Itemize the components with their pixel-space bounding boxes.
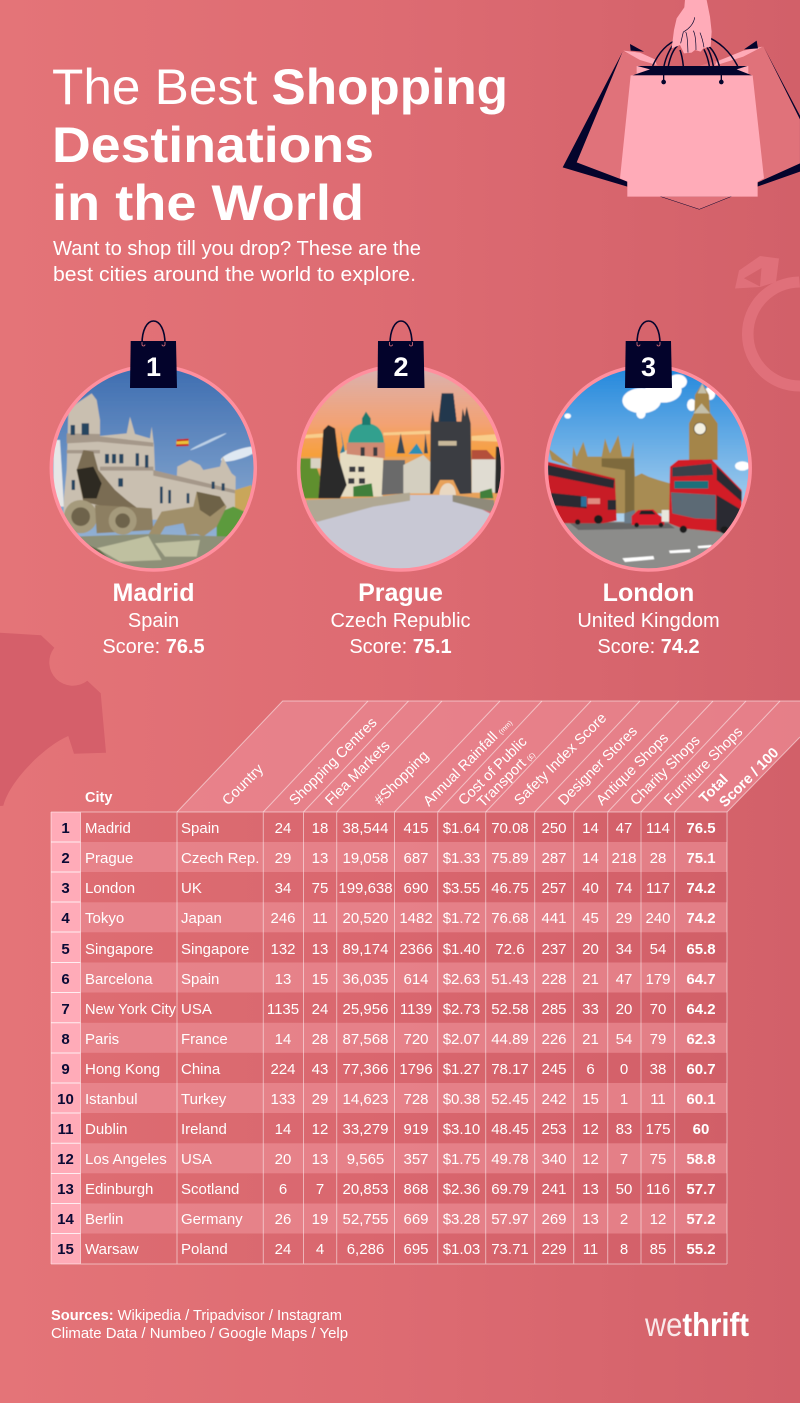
- row 12 Los Angeles: Los Angeles: [85, 1151, 167, 1168]
- row 12 Los Angeles: 58.8: [686, 1151, 716, 1168]
- row 14 Berlin: Berlin: [85, 1211, 123, 1228]
- photo ring: [299, 366, 503, 570]
- row 14 Berlin: 13: [582, 1211, 599, 1228]
- row 3 London: $3.55: [443, 880, 480, 897]
- row 15 Warsaw: 11: [583, 1241, 598, 1258]
- row 10 Istanbul: 1: [620, 1091, 628, 1108]
- row 13 Edinburgh: 868: [403, 1181, 429, 1198]
- row 4 Tokyo: 20,520: [343, 910, 388, 927]
- row 15 Warsaw: 85: [650, 1241, 666, 1258]
- row 2 Prague: 287: [541, 850, 567, 867]
- row 15 Warsaw: 73.71: [491, 1241, 529, 1258]
- rank badge 3: [625, 321, 672, 388]
- left back bag: [563, 44, 673, 187]
- row 4 Tokyo: 441: [541, 910, 567, 927]
- row 9 Hong Kong: Hong Kong: [85, 1061, 160, 1078]
- row 6 Barcelona: 228: [541, 971, 567, 988]
- row 10 Istanbul: Turkey: [181, 1091, 227, 1108]
- row 5 Singapore: 13: [312, 941, 328, 958]
- row 8 Paris: 79: [650, 1031, 666, 1048]
- row 4 Tokyo: Tokyo: [85, 910, 124, 927]
- row 11 Dublin: Ireland: [181, 1121, 227, 1138]
- row 3 London: 74: [616, 880, 632, 897]
- row stripes: [80, 812, 727, 1264]
- row 6 Barcelona: 51.43: [491, 971, 529, 988]
- row 6 Barcelona: [61, 971, 716, 988]
- row 15 Warsaw: 8: [620, 1241, 628, 1258]
- row 5 Singapore: 65.8: [686, 941, 716, 958]
- row 10 Istanbul: $0.38: [443, 1091, 480, 1108]
- panel: rank 2 Prague: [297, 321, 507, 658]
- column headings rotated: Cost of Public: [456, 734, 531, 809]
- column headings rotated: Flea Markets: [323, 738, 393, 809]
- row 11 Dublin: 14: [275, 1121, 291, 1138]
- row 8 Paris: 720: [403, 1031, 429, 1048]
- row 6 Barcelona: 64.7: [686, 971, 716, 988]
- rank badge 1: 1: [146, 352, 161, 382]
- row 11 Dublin: 175: [645, 1121, 671, 1138]
- row 14 Berlin: 14: [57, 1211, 74, 1228]
- decorative ring icon: [735, 256, 800, 392]
- row 11 Dublin: 83: [616, 1121, 632, 1138]
- row 15 Warsaw: 6,286: [347, 1241, 384, 1258]
- row 10 Istanbul: 29: [312, 1091, 328, 1108]
- row 13 Edinburgh: Edinburgh: [85, 1181, 153, 1198]
- row 15 Warsaw: 229: [541, 1241, 567, 1258]
- row 9 Hong Kong: [61, 1061, 716, 1078]
- row 8 Paris: 87,568: [343, 1031, 388, 1048]
- row 13 Edinburgh: 20,853: [343, 1181, 388, 1198]
- row 2 Prague: 687: [403, 850, 429, 867]
- row 9 Hong Kong: 245: [541, 1061, 567, 1078]
- row 10 Istanbul: 242: [541, 1091, 567, 1108]
- hand: [672, 0, 712, 53]
- row 12 Los Angeles: USA: [181, 1151, 212, 1168]
- row 13 Edinburgh: 6: [279, 1181, 287, 1198]
- city label Prague: Czech Republic: [330, 610, 471, 632]
- row 8 Paris: 226: [541, 1031, 567, 1048]
- row 1 Madrid: 38,544: [343, 820, 388, 837]
- row 3 London: 257: [541, 880, 567, 897]
- city label London: London: [603, 579, 694, 607]
- row 2 Prague: 28: [650, 850, 666, 867]
- row 14 Berlin: Germany: [181, 1211, 243, 1228]
- row 3 London: 34: [275, 880, 291, 897]
- row 11 Dublin: 12: [582, 1121, 599, 1138]
- row 3 London: 690: [403, 880, 429, 897]
- row 5 Singapore: 54: [650, 941, 666, 958]
- row 3 London: 117: [646, 880, 670, 897]
- row 15 Warsaw: 695: [403, 1241, 429, 1258]
- row 4 Tokyo: 240: [645, 910, 671, 927]
- row 12 Los Angeles: 9,565: [347, 1151, 384, 1168]
- row 1 Madrid: 1: [61, 820, 70, 837]
- row 11 Dublin: 12: [312, 1121, 328, 1138]
- row 5 Singapore: 34: [616, 941, 632, 958]
- row 1 Madrid: 14: [582, 820, 599, 837]
- city label London: Score: 74.2: [597, 636, 700, 658]
- column headings rotated: Antique Shops: [594, 730, 672, 809]
- logo: wethrift: wethrift: [644, 1306, 749, 1343]
- row 3 London: 75: [312, 880, 328, 897]
- row 5 Singapore: 5: [61, 941, 70, 958]
- row 8 Paris: $2.07: [443, 1031, 480, 1048]
- row 4 Tokyo: $1.72: [443, 910, 480, 927]
- row 6 Barcelona: 179: [645, 971, 671, 988]
- row 3 London: [61, 880, 716, 897]
- row 12 Los Angeles: $1.75: [443, 1151, 480, 1168]
- row 14 Berlin: [57, 1211, 716, 1228]
- row 13 Edinburgh: Scotland: [181, 1181, 239, 1198]
- city label Madrid: Spain: [128, 610, 179, 632]
- row 13 Edinburgh: 241: [541, 1181, 567, 1198]
- sources: [51, 1307, 348, 1342]
- row 7 New York City: 33: [582, 1001, 599, 1018]
- photo ring: [546, 366, 750, 570]
- row 1 Madrid: 415: [403, 820, 429, 837]
- right back bag: [700, 41, 800, 187]
- row 1 Madrid: 24: [275, 820, 291, 837]
- table: [51, 812, 727, 1264]
- row 13 Edinburgh: 13: [582, 1181, 599, 1198]
- row 1 Madrid: Spain: [181, 820, 219, 837]
- subtitle: [53, 238, 421, 286]
- row 9 Hong Kong: 1796: [399, 1061, 433, 1078]
- row 6 Barcelona: $2.63: [443, 971, 480, 988]
- photo: Prague: [297, 363, 507, 573]
- row 10 Istanbul: 728: [403, 1091, 429, 1108]
- row 14 Berlin: 12: [650, 1211, 666, 1228]
- row 7 New York City: 24: [312, 1001, 328, 1018]
- city label London: [577, 579, 720, 658]
- rank column: [51, 812, 80, 1264]
- row 6 Barcelona: 15: [312, 971, 328, 988]
- row 6 Barcelona: Barcelona: [85, 971, 153, 988]
- row 2 Prague: 75.89: [491, 850, 529, 867]
- city label Madrid: [102, 579, 205, 658]
- column headings rotated: Shopping Centres: [287, 715, 380, 809]
- column headings rotated: Total: [697, 772, 732, 807]
- row 8 Paris: 8: [61, 1031, 70, 1048]
- row 6 Barcelona: 6: [61, 971, 70, 988]
- row 15 Warsaw: 4: [316, 1241, 324, 1258]
- table header: [85, 701, 800, 812]
- row 4 Tokyo: 4: [61, 910, 70, 927]
- row 4 Tokyo: 246: [270, 910, 296, 927]
- row 3 London: 199,638: [338, 880, 393, 897]
- row 7 New York City: 64.2: [686, 1001, 716, 1018]
- rank badge 2: 2: [393, 352, 409, 382]
- row 13 Edinburgh: [57, 1181, 716, 1198]
- row 10 Istanbul: Istanbul: [85, 1091, 138, 1108]
- row 8 Paris: Paris: [85, 1031, 119, 1048]
- row 11 Dublin: 11: [58, 1121, 73, 1138]
- row 9 Hong Kong: 60.7: [686, 1061, 716, 1078]
- row 8 Paris: 44.89: [491, 1031, 529, 1048]
- row 1 Madrid: Madrid: [85, 820, 131, 837]
- city label London: United Kingdom: [577, 610, 720, 632]
- row 11 Dublin: 919: [403, 1121, 429, 1138]
- row 11 Dublin: 48.45: [491, 1121, 529, 1138]
- city label Prague: Score: 75.1: [349, 636, 452, 658]
- row 14 Berlin: 26: [275, 1211, 291, 1228]
- subtitle: best cities around the world to explore.: [53, 264, 416, 286]
- row 10 Istanbul: 15: [582, 1091, 599, 1108]
- row 4 Tokyo: [61, 910, 716, 927]
- row 4 Tokyo: 1482: [399, 910, 433, 927]
- row 2 Prague: 75.1: [686, 850, 716, 867]
- row 11 Dublin: 33,279: [343, 1121, 388, 1138]
- decorative shape lower left: [0, 633, 106, 806]
- sources: Climate Data / Numbeo / Google Maps / Yelp: [51, 1325, 348, 1342]
- row 1 Madrid: 47: [616, 820, 632, 837]
- row 5 Singapore: Singapore: [85, 941, 153, 958]
- row 8 Paris: France: [181, 1031, 228, 1048]
- row 14 Berlin: 57.97: [491, 1211, 529, 1228]
- row 8 Paris: 62.3: [686, 1031, 716, 1048]
- row 2 Prague: 19,058: [343, 850, 388, 867]
- row 5 Singapore: 20: [582, 941, 599, 958]
- row 8 Paris: 28: [312, 1031, 328, 1048]
- row 1 Madrid: $1.64: [443, 820, 480, 837]
- rank badge 3: 3: [641, 352, 656, 382]
- row 12 Los Angeles: 12: [582, 1151, 599, 1168]
- column headings rotated: Charity Shops: [628, 733, 704, 809]
- row 12 Los Angeles: [57, 1151, 716, 1168]
- row 2 Prague: 14: [582, 850, 599, 867]
- row 14 Berlin: 19: [312, 1211, 328, 1228]
- row 9 Hong Kong: 38: [650, 1061, 666, 1078]
- row 9 Hong Kong: 77,366: [343, 1061, 388, 1078]
- row 2 Prague: 29: [275, 850, 291, 867]
- row 12 Los Angeles: 75: [650, 1151, 666, 1168]
- row 5 Singapore: $1.40: [443, 941, 480, 958]
- row 14 Berlin: 2: [620, 1211, 628, 1228]
- panel: rank 1 Madrid: [50, 321, 260, 658]
- row 6 Barcelona: 614: [403, 971, 429, 988]
- row 12 Los Angeles: 357: [403, 1151, 429, 1168]
- row 9 Hong Kong: 43: [312, 1061, 328, 1078]
- city label Prague: Prague: [358, 579, 443, 607]
- row 4 Tokyo: 45: [582, 910, 599, 927]
- column heading City: City: [85, 790, 112, 806]
- row 11 Dublin: Dublin: [85, 1121, 128, 1138]
- row 15 Warsaw: 55.2: [686, 1241, 716, 1258]
- row 9 Hong Kong: 0: [620, 1061, 628, 1078]
- row 14 Berlin: 57.2: [686, 1211, 716, 1228]
- row 10 Istanbul: 60.1: [686, 1091, 716, 1108]
- row 2 Prague: 2: [61, 850, 70, 867]
- photo ring: [51, 366, 255, 570]
- row 7 New York City: 25,956: [343, 1001, 388, 1018]
- row 2 Prague: Czech Rep.: [181, 850, 259, 867]
- row 4 Tokyo: 76.68: [491, 910, 529, 927]
- rank badge 2: [378, 321, 424, 388]
- column headings rotated: Score / 100: [717, 745, 782, 811]
- row 12 Los Angeles: 12: [57, 1151, 74, 1168]
- row 1 Madrid: [61, 820, 716, 837]
- row 4 Tokyo: Japan: [181, 910, 222, 927]
- row 11 Dublin: 253: [541, 1121, 567, 1138]
- row 11 Dublin: 60: [693, 1121, 709, 1138]
- row 1 Madrid: 250: [541, 820, 567, 837]
- row 4 Tokyo: 74.2: [686, 910, 716, 927]
- title: in the World: [52, 175, 364, 231]
- row 2 Prague: 218: [611, 850, 637, 867]
- row 13 Edinburgh: 7: [316, 1181, 324, 1198]
- row 4 Tokyo: 29: [616, 910, 632, 927]
- row 15 Warsaw: [57, 1241, 716, 1258]
- row 6 Barcelona: 13: [275, 971, 291, 988]
- row 7 New York City: [61, 1001, 716, 1018]
- row 7 New York City: $2.73: [443, 1001, 480, 1018]
- title: Destinations: [52, 117, 374, 173]
- column headings rotated: Country: [220, 761, 267, 809]
- row 7 New York City: 20: [616, 1001, 632, 1018]
- row 15 Warsaw: 15: [57, 1241, 74, 1258]
- row 14 Berlin: 52,755: [343, 1211, 388, 1228]
- row 7 New York City: 70: [650, 1001, 666, 1018]
- row 6 Barcelona: 36,035: [343, 971, 388, 988]
- row 2 Prague: 13: [312, 850, 328, 867]
- row 7 New York City: 52.58: [491, 1001, 529, 1018]
- row 15 Warsaw: 24: [275, 1241, 291, 1258]
- column headings rotated: [220, 710, 782, 811]
- column headings rotated: Transport (£): [475, 747, 539, 811]
- row 5 Singapore: [61, 941, 716, 958]
- row 13 Edinburgh: 13: [57, 1181, 74, 1198]
- row 6 Barcelona: 21: [582, 971, 599, 988]
- row 13 Edinburgh: 69.79: [491, 1181, 529, 1198]
- row 7 New York City: USA: [181, 1001, 212, 1018]
- row 5 Singapore: 132: [270, 941, 296, 958]
- row 10 Istanbul: [57, 1091, 716, 1108]
- row 9 Hong Kong: 6: [586, 1061, 595, 1078]
- row 13 Edinburgh: $2.36: [443, 1181, 480, 1198]
- row 5 Singapore: 2366: [399, 941, 433, 958]
- row 8 Paris: 54: [616, 1031, 632, 1048]
- row 3 London: 3: [61, 880, 70, 897]
- title: The Best Shopping: [52, 59, 508, 115]
- row 13 Edinburgh: 50: [616, 1181, 632, 1198]
- column headings rotated: Safety Index Score: [512, 710, 610, 809]
- row 12 Los Angeles: 7: [620, 1151, 628, 1168]
- bag handles: [653, 35, 738, 66]
- row 7 New York City: New York City: [85, 1001, 176, 1018]
- row 8 Paris: [61, 1031, 716, 1048]
- row 7 New York City: 7: [61, 1001, 70, 1018]
- row 14 Berlin: 669: [403, 1211, 429, 1228]
- column headings rotated: Annual Rainfall (mm): [421, 715, 516, 810]
- row 1 Madrid: 114: [646, 820, 670, 837]
- row 1 Madrid: 70.08: [491, 820, 529, 837]
- row 3 London: UK: [181, 880, 202, 897]
- row 12 Los Angeles: 340: [541, 1151, 567, 1168]
- bottom of back bag: [660, 196, 732, 209]
- row 15 Warsaw: $1.03: [443, 1241, 480, 1258]
- sources: Sources: Wikipedia / Tripadvisor / Instagram: [51, 1307, 342, 1324]
- city label Prague: [330, 579, 471, 658]
- row 10 Istanbul: 52.45: [491, 1091, 529, 1108]
- row 12 Los Angeles: 49.78: [491, 1151, 529, 1168]
- column headings rotated: #Shopping: [372, 748, 432, 809]
- row 7 New York City: 1135: [267, 1001, 299, 1018]
- row 11 Dublin: $3.10: [443, 1121, 480, 1138]
- row 1 Madrid: 18: [312, 820, 328, 837]
- row 9 Hong Kong: 9: [61, 1061, 70, 1078]
- column headings rotated: Furniture Shops: [662, 724, 746, 809]
- row 1 Madrid: 76.5: [686, 820, 716, 837]
- row 12 Los Angeles: 20: [275, 1151, 291, 1168]
- row 9 Hong Kong: $1.27: [443, 1061, 480, 1078]
- subtitle: Want to shop till you drop? These are the: [53, 238, 421, 260]
- title: [52, 59, 508, 231]
- row 5 Singapore: 237: [541, 941, 567, 958]
- row 11 Dublin: [58, 1121, 709, 1138]
- row 8 Paris: 21: [582, 1031, 599, 1048]
- row 2 Prague: [61, 850, 716, 867]
- icon: shopping bags and hand: [563, 0, 800, 209]
- row 3 London: 40: [582, 880, 599, 897]
- row 6 Barcelona: Spain: [181, 971, 219, 988]
- row 8 Paris: 14: [275, 1031, 291, 1048]
- panel: rank 3 London: [542, 321, 755, 658]
- row 10 Istanbul: 14,623: [343, 1091, 388, 1108]
- row 4 Tokyo: 11: [312, 910, 328, 927]
- row 9 Hong Kong: 224: [270, 1061, 296, 1078]
- photo: London: [548, 370, 748, 568]
- row 10 Istanbul: 10: [57, 1091, 74, 1108]
- row 3 London: 46.75: [491, 880, 529, 897]
- city label Madrid: Madrid: [113, 579, 194, 607]
- row 2 Prague: Prague: [85, 850, 133, 867]
- row 10 Istanbul: 133: [270, 1091, 296, 1108]
- row 14 Berlin: $3.28: [443, 1211, 480, 1228]
- column headings rotated: Designer Stores: [556, 724, 641, 809]
- row 7 New York City: 285: [541, 1001, 567, 1018]
- row 6 Barcelona: 47: [616, 971, 632, 988]
- row 14 Berlin: 269: [541, 1211, 567, 1228]
- rank badge 1: [130, 321, 177, 388]
- row 3 London: 74.2: [686, 880, 716, 897]
- front bag: [620, 66, 764, 197]
- row 10 Istanbul: 11: [650, 1091, 666, 1108]
- row 5 Singapore: 89,174: [343, 941, 388, 958]
- row 7 New York City: 1139: [400, 1001, 432, 1018]
- row 9 Hong Kong: 78.17: [491, 1061, 529, 1078]
- row 9 Hong Kong: China: [181, 1061, 221, 1078]
- row 13 Edinburgh: 57.7: [686, 1181, 716, 1198]
- row 3 London: London: [85, 880, 135, 897]
- row 15 Warsaw: Warsaw: [85, 1241, 139, 1258]
- row 5 Singapore: Singapore: [181, 941, 249, 958]
- row 2 Prague: $1.33: [443, 850, 480, 867]
- row 13 Edinburgh: 116: [646, 1181, 670, 1198]
- row 15 Warsaw: Poland: [181, 1241, 228, 1258]
- city label Madrid: Score: 76.5: [102, 636, 205, 658]
- row 12 Los Angeles: 13: [312, 1151, 328, 1168]
- photo: Madrid: [53, 370, 254, 568]
- row 5 Singapore: 72.6: [495, 941, 525, 958]
